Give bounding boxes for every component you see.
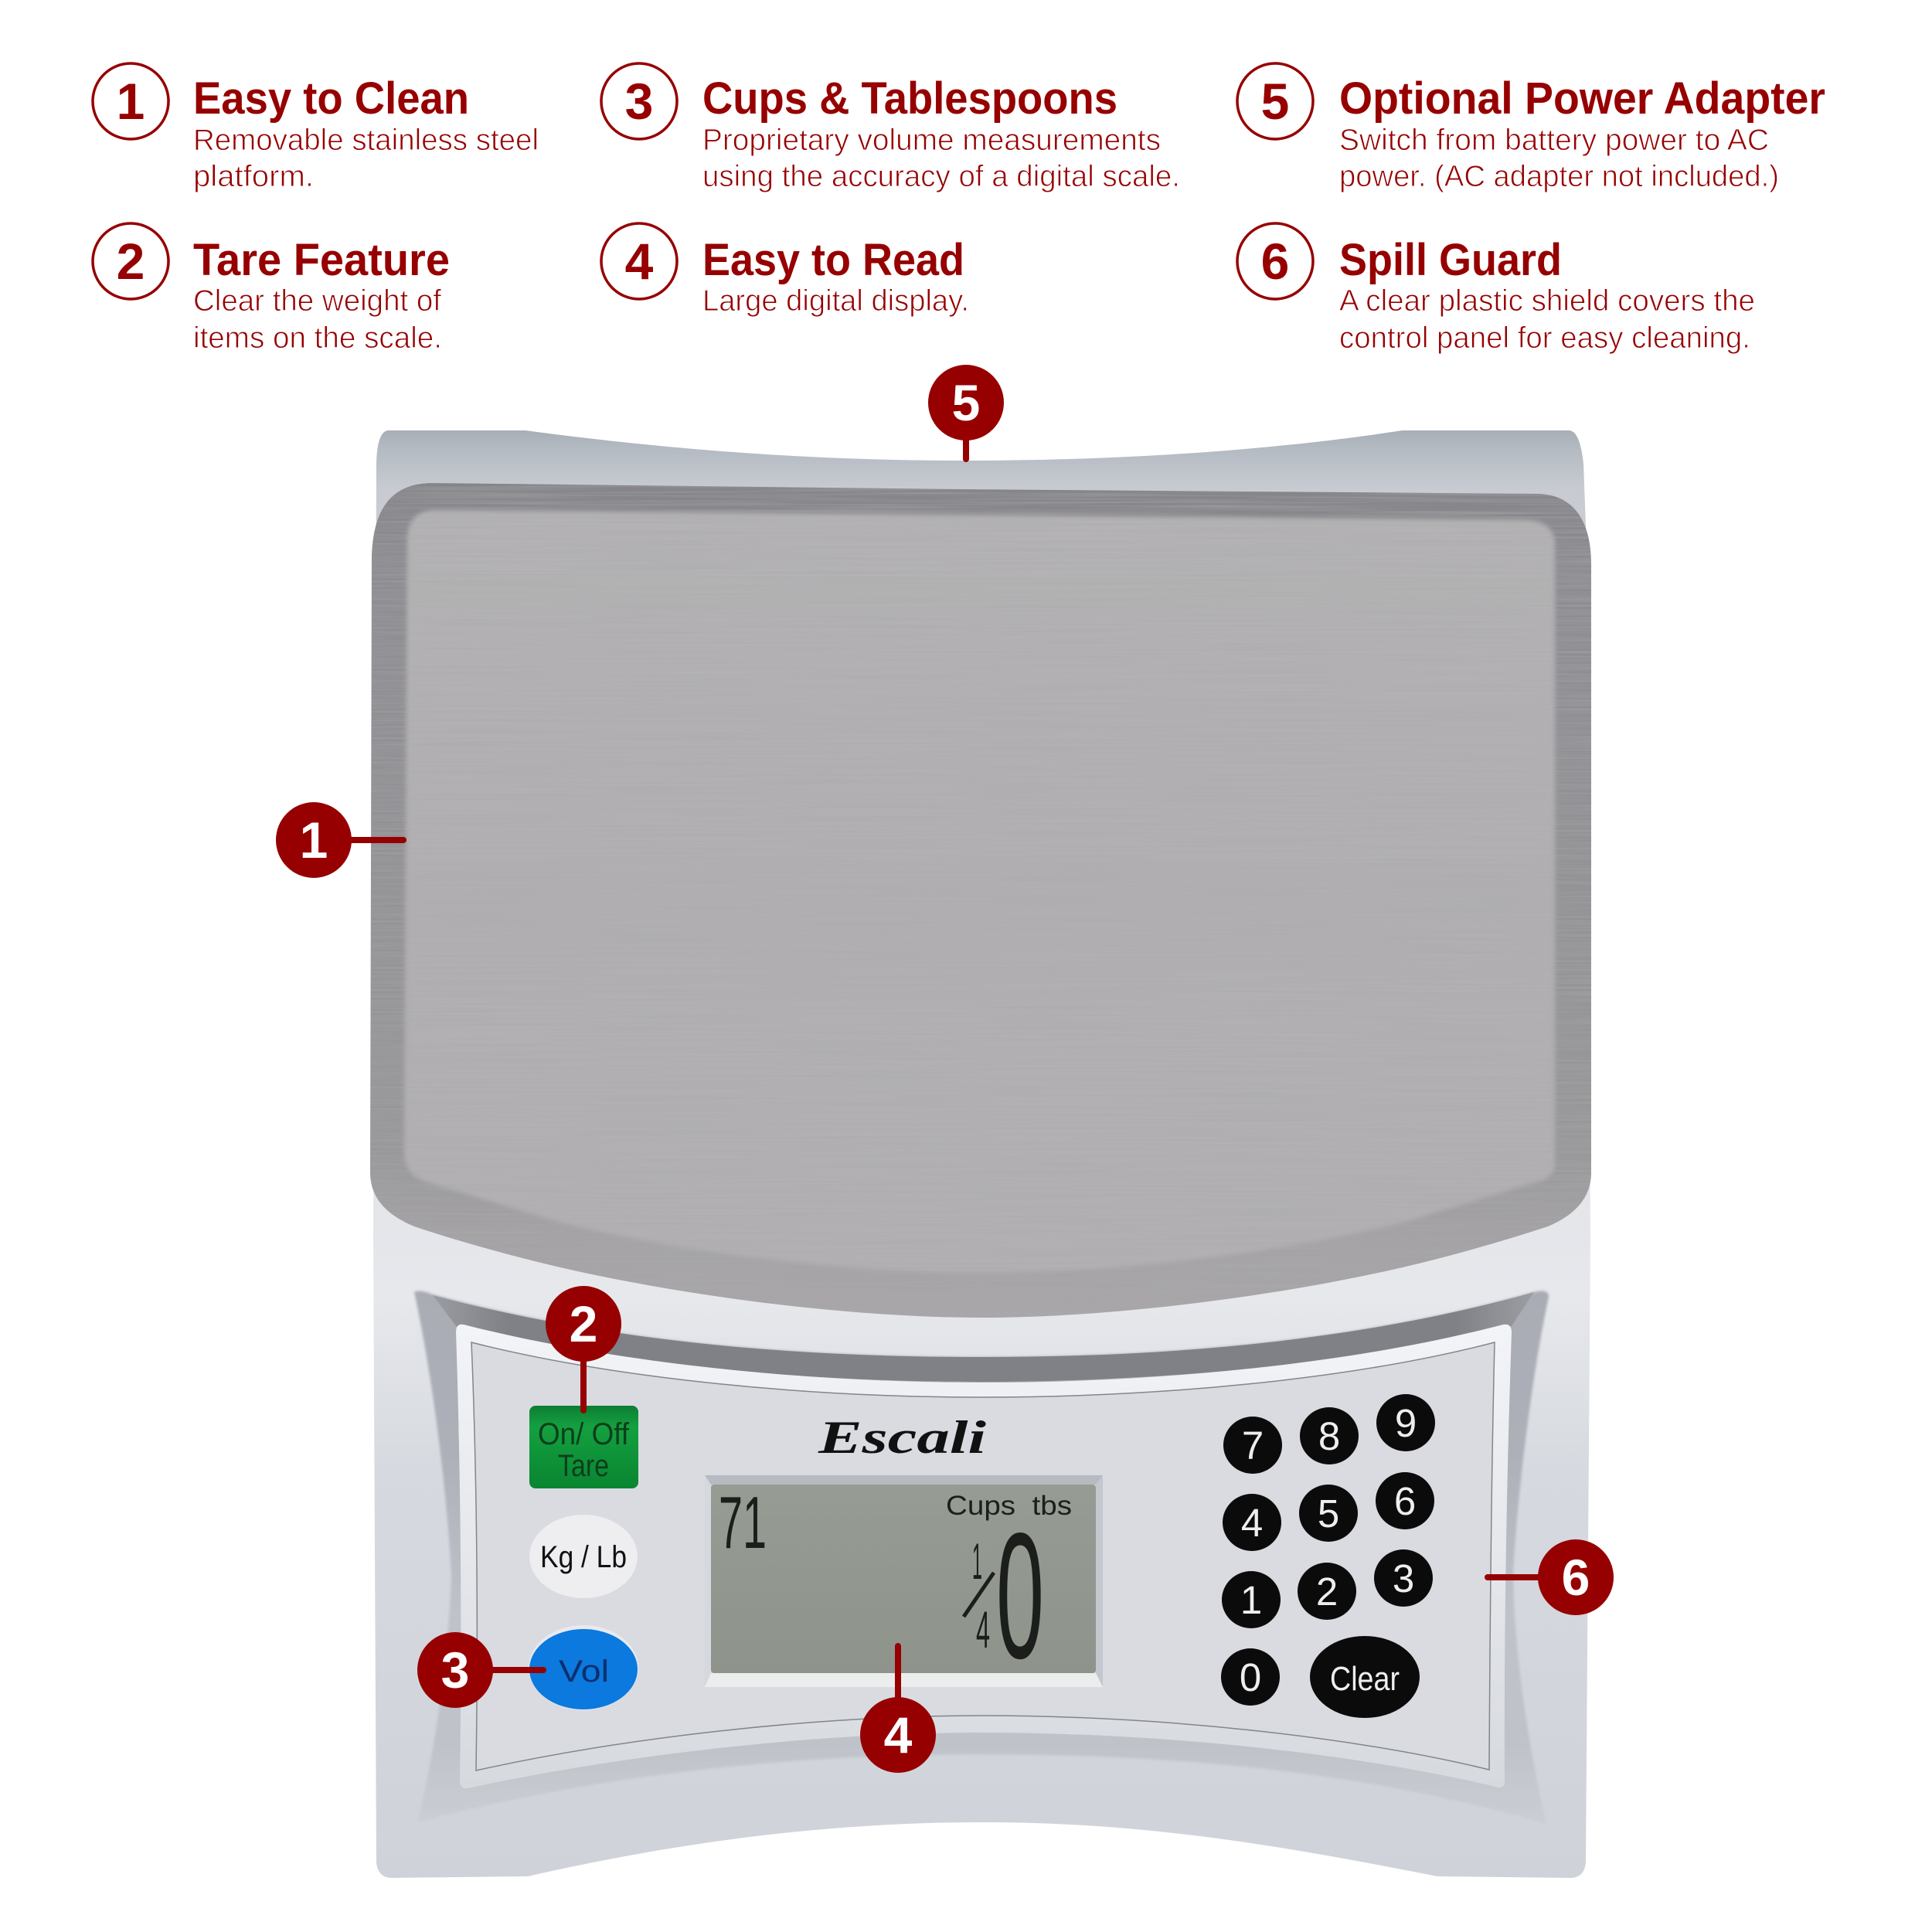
callout 6: spill guard: 6 [1562,1549,1590,1606]
kg/lb button: Kg / Lb [540,1540,627,1574]
numeric keypad: Clear [1330,1660,1400,1698]
feature 6: spill guard: 6 [1261,233,1289,290]
kitchen scale illustration [370,430,1591,1878]
numeric keypad: 7 [1242,1423,1264,1468]
feature 1: easy to clean: Easy to Clean [193,73,469,124]
on/off tare button: On/ Off [538,1417,630,1451]
lcd display: 1 [972,1532,982,1590]
numeric keypad [1221,1394,1435,1718]
callout 3: volume button: 3 [441,1641,469,1699]
numeric keypad: 0 [1240,1655,1261,1699]
lcd display: 71 [719,1481,767,1564]
on/off tare button: Tare [558,1449,609,1483]
feature 4: easy to read [601,223,969,318]
feature 2: tare feature: items on the scale. [193,321,442,355]
feature 6: spill guard: A clear plastic shield covers the [1339,284,1755,318]
callout 2: tare button: 2 [570,1295,597,1352]
feature 3: cups and tablespoons [601,63,1180,193]
feature 2: tare feature: Clear the weight of [193,284,441,318]
callout 4: display: 4 [884,1706,913,1764]
feature 1: easy to clean: 1 [117,73,145,130]
lcd display: 4 [976,1600,990,1659]
feature 4: easy to read: Large digital display. [702,284,969,318]
control panel [456,1325,1512,1788]
feature 5: optional power adapter [1237,63,1825,193]
feature 6: spill guard: Spill Guard [1339,235,1562,285]
feature 2: tare feature [93,223,450,355]
feature 6: spill guard [1237,223,1755,355]
numeric keypad: 5 [1318,1492,1339,1536]
callout 5: power adapter: 5 [952,374,980,431]
escali logo: Escali [818,1412,986,1463]
feature 4: easy to read: 4 [625,233,654,290]
feature 6: spill guard: control panel for easy cleaning. [1339,321,1750,355]
numeric keypad: 8 [1318,1414,1340,1458]
scale body [373,430,1590,1878]
callout 2: tare button [546,1286,621,1410]
stainless steel platform [370,483,1591,1318]
callout 1: platform [276,802,403,878]
kg/lb button [529,1515,638,1598]
feature 5: optional power adapter: Optional Power Adapter [1339,73,1825,124]
callout 6: spill guard [1488,1539,1614,1615]
feature 5: optional power adapter: 5 [1261,73,1289,130]
feature 3: cups and tablespoons: Proprietary volume measurements [702,124,1161,157]
lcd display [705,1475,1103,1696]
volume button [529,1625,638,1710]
feature 1: easy to clean: Removable stainless steel [193,124,539,157]
numeric keypad: 9 [1395,1401,1417,1445]
lcd display: 0 [996,1496,1044,1696]
feature 3: cups and tablespoons: Cups & Tablespoons [702,73,1117,124]
feature 2: tare feature: Tare Feature [193,235,450,285]
callout 4: display [860,1646,936,1773]
feature 5: optional power adapter: power. (AC adapter not included.) [1339,160,1779,193]
feature list [93,63,1825,355]
numeric keypad: 2 [1316,1570,1338,1614]
feature 1: easy to clean: platform. [193,160,314,193]
feature 3: cups and tablespoons: using the accuracy of a digital scale. [702,160,1180,193]
numeric keypad: 6 [1394,1479,1416,1523]
feature 1: easy to clean [93,63,539,193]
lcd display: Cups tbs [946,1491,1072,1521]
feature 5: optional power adapter: Switch from battery power to AC [1339,124,1769,157]
feature 2: tare feature: 2 [117,233,145,290]
on/off tare button [529,1406,638,1488]
callout 3: volume button [417,1632,543,1708]
numeric keypad: 1 [1240,1578,1262,1622]
numeric keypad: 3 [1393,1556,1414,1600]
volume button: Vol [559,1655,609,1689]
control panel recess [414,1291,1549,1824]
callout 1: platform: 1 [300,811,328,869]
callout 5: power adapter [928,365,1004,459]
feature 4: easy to read: Easy to Read [702,235,964,285]
numeric keypad: 4 [1241,1501,1263,1545]
feature 3: cups and tablespoons: 3 [625,73,653,130]
